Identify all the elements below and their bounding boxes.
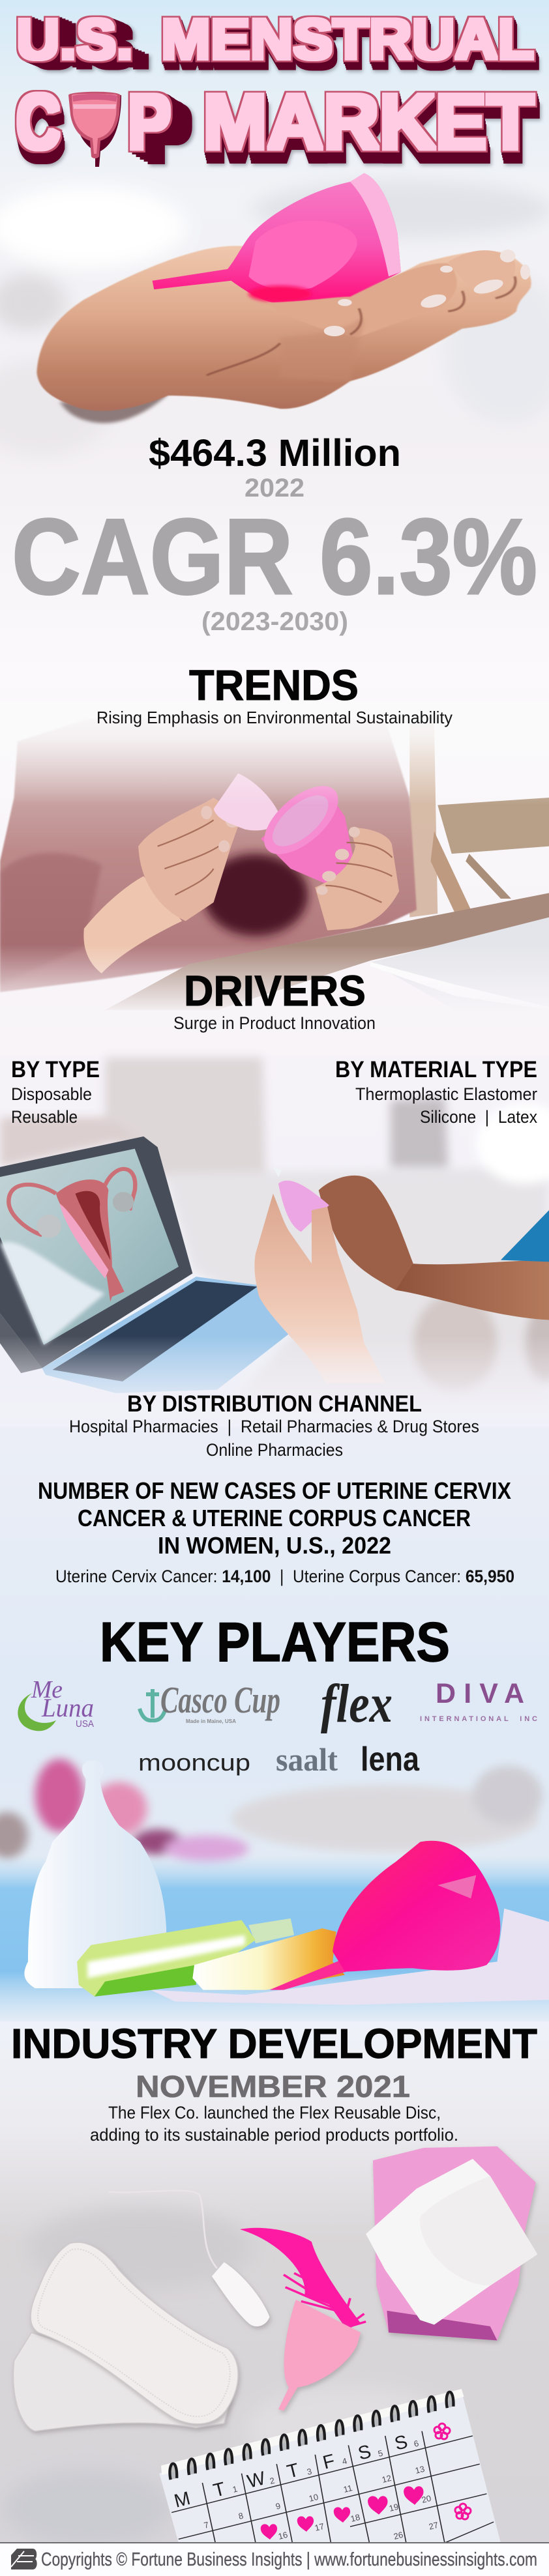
white cup: [24, 1761, 166, 1988]
logo: lena: lena: [361, 1741, 420, 1778]
calendar day letters: M: [172, 2488, 192, 2512]
panel: industry development photo of period products: [3, 2147, 537, 2545]
calendar flowers: [434, 2424, 471, 2519]
logo: Me Luna USA: [18, 1676, 94, 1731]
right hand: [315, 828, 399, 931]
title line 1: [16, 8, 534, 71]
development text: adding to its sustainable period products portfolio.: [90, 2125, 458, 2145]
forecast period: (2023-2030): [201, 607, 348, 636]
by material type segment: Silicone | Latex: [420, 1107, 537, 1127]
trends photo bottom fade: [0, 945, 549, 1056]
by distribution channel segment: Hospital Pharmacies | Retail Pharmacies & Drug Stores: [69, 1417, 479, 1436]
dark torso shadow: [203, 854, 308, 936]
calendar date numbers: 6: [413, 2439, 420, 2449]
cloth: [151, 1909, 549, 2005]
blue sleeve: [501, 1210, 549, 1262]
by type segment: [11, 1057, 100, 1127]
development text: The Flex Co. launched the Flex Reusable Disc,: [108, 2103, 441, 2122]
calendar date numbers: [203, 2439, 439, 2541]
calendar date numbers: 19: [388, 2502, 400, 2513]
calendar date numbers: 13: [414, 2464, 426, 2476]
by distribution channel segment: Online Pharmacies: [206, 1440, 343, 1460]
calendar day letters: T: [285, 2459, 301, 2483]
title line 1: U.S.: [16, 8, 133, 71]
new cancer cases heading: CANCER & UTERINE CORPUS CANCER: [78, 1505, 471, 1531]
trends heading: TRENDS: [189, 661, 359, 709]
laptop lid: [0, 1136, 192, 1368]
panel: key players photo of cups and tampons: [0, 1759, 549, 2021]
sweater: [0, 719, 417, 992]
calendar date numbers: 9: [274, 2501, 282, 2511]
calendar date numbers: 2: [269, 2476, 276, 2486]
by type segment: Disposable: [11, 1084, 92, 1104]
sleeve shadow: [59, 394, 168, 423]
panel: trends photo of woman with cup and sterilizer: [0, 719, 549, 1010]
cancer case figures: Uterine Cervix Cancer: 14,100 | Uterine Corpus Cancer: 65,950: [55, 1567, 514, 1586]
white folded pad: [366, 2159, 537, 2324]
logo: saalt: saalt: [276, 1741, 338, 1778]
logo: Casco Cup: Casco Cup: [160, 1679, 280, 1721]
calendar date numbers: 3: [306, 2467, 313, 2477]
blurred blossoms: [0, 1759, 542, 1862]
calendar date numbers: 8: [237, 2511, 245, 2521]
cup: [278, 1181, 329, 1232]
by material type segment: BY MATERIAL TYPE: [335, 1057, 537, 1082]
logo: Mooncup: mooncup: [138, 1749, 250, 1776]
logo: Me Luna USA: USA: [76, 1718, 94, 1729]
tampon: [212, 2262, 269, 2326]
logo: flex: flex: [321, 1673, 393, 1734]
by distribution channel segment: [69, 1391, 479, 1460]
title line 1: MENSTRUAL: [161, 8, 534, 71]
feather: [240, 2228, 366, 2330]
base year: 2022: [245, 474, 304, 502]
left forearm and hand: [83, 876, 182, 974]
cup: [153, 173, 401, 302]
title line 2: MARKET: [203, 78, 534, 166]
title line 2: C: [16, 78, 60, 166]
drivers heading: DRIVERS: [184, 966, 366, 1015]
logo: Diva International Inc: DIVA: [436, 1678, 524, 1709]
logo: Diva International Inc: INTERNATIONAL INC: [420, 1715, 537, 1723]
clear cup: [214, 774, 299, 830]
marble shade: [3, 2207, 455, 2545]
new cancer cases heading: IN WOMEN, U.S., 2022: [158, 1532, 391, 1559]
finger creases: [207, 276, 516, 375]
hand: [37, 246, 531, 411]
calendar day letters: W: [245, 2468, 268, 2493]
laptop base and keyboard: [42, 1277, 294, 1393]
calendar date numbers: 7: [203, 2520, 210, 2530]
logo: Me Luna USA: Luna: [41, 1693, 94, 1722]
footer: [0, 2542, 549, 2576]
logo: Casco Cup: [140, 1679, 280, 1724]
calendar day letters: S: [356, 2441, 373, 2465]
development date: NOVEMBER 2021: [136, 2069, 410, 2104]
calendar sheet: [159, 2394, 501, 2543]
nails: [324, 250, 530, 336]
green tampon: [77, 1918, 294, 1997]
laptop screen: [0, 1149, 179, 1345]
blurred room: [0, 1057, 549, 1410]
calendar day letters: T: [211, 2478, 228, 2502]
table and laptop: [105, 893, 549, 1010]
industry development heading: INDUSTRY DEVELOPMENT: [11, 2020, 537, 2067]
icon: menstrual cup in title: [68, 92, 121, 167]
pink packages: [373, 2147, 536, 2340]
calendar date numbers: 26: [393, 2530, 404, 2541]
upper hand and arm: [396, 1260, 549, 1320]
panel: hero photo of hand holding pink cup: [0, 173, 549, 457]
calendar day letters: [172, 2431, 409, 2512]
key players heading: KEY PLAYERS: [100, 1612, 450, 1673]
calendar date numbers: 17: [314, 2521, 325, 2533]
by material type segment: Thermoplastic Elastomer: [355, 1084, 537, 1104]
pink cup: [278, 2300, 361, 2411]
lower hand: [254, 1194, 385, 1383]
drivers photo bottom fade: [0, 1336, 549, 1427]
title: [16, 8, 534, 166]
calendar grid: [171, 2431, 494, 2543]
chair: [409, 723, 549, 918]
blue table band: [0, 1855, 549, 2021]
logo: Diva International Inc: [420, 1678, 537, 1723]
pink cup: [269, 1958, 347, 1990]
logo: Casco Cup: Made in Maine, USA: [186, 1718, 236, 1724]
calendar day letters: S: [393, 2431, 409, 2455]
calendar date numbers: 10: [308, 2492, 319, 2504]
calendar spiral: [170, 2392, 453, 2480]
market size value: $464.3 Million: [149, 432, 401, 474]
by type segment: BY TYPE: [11, 1057, 100, 1082]
title line 2: P: [128, 78, 171, 166]
by material type segment: [335, 1057, 537, 1127]
pink collapsible cup: [261, 787, 355, 884]
calendar date numbers: 5: [377, 2448, 384, 2459]
calendar date numbers: 27: [428, 2520, 439, 2532]
by type segment: Reusable: [11, 1107, 78, 1127]
logo: Me Luna USA: Me: [31, 1676, 63, 1703]
trends photo top fade: [0, 701, 549, 805]
calendar hearts: [261, 2486, 424, 2540]
calendar date numbers: 18: [349, 2512, 361, 2524]
new cancer cases heading: [38, 1477, 511, 1559]
fingers in front: [266, 263, 457, 338]
back pad: [13, 2332, 231, 2431]
calendar day letters: F: [321, 2450, 337, 2474]
calendar date numbers: 11: [342, 2483, 353, 2495]
front pad: [31, 2242, 238, 2424]
title line 2: [16, 78, 534, 166]
calendar date numbers: 16: [277, 2530, 289, 2541]
uterus illustration: [8, 1169, 135, 1235]
by distribution channel segment: BY DISTRIBUTION CHANNEL: [127, 1391, 422, 1417]
development text: [90, 2103, 458, 2145]
trends text: Rising Emphasis on Environmental Sustainability: [96, 708, 453, 727]
calendar date numbers: 4: [341, 2456, 348, 2467]
cloudy background: [0, 181, 549, 457]
calendar date numbers: 12: [381, 2473, 393, 2485]
calendar date numbers: 1: [231, 2484, 239, 2495]
panel: drivers photo of laptop and hands with cup: [0, 1057, 549, 1410]
orange tampon: [192, 1928, 345, 1990]
icon: Fortune Business Insights logo: [11, 2549, 37, 2569]
drivers text: Surge in Product Innovation: [173, 1013, 376, 1033]
calendar date numbers: 20: [421, 2493, 432, 2505]
